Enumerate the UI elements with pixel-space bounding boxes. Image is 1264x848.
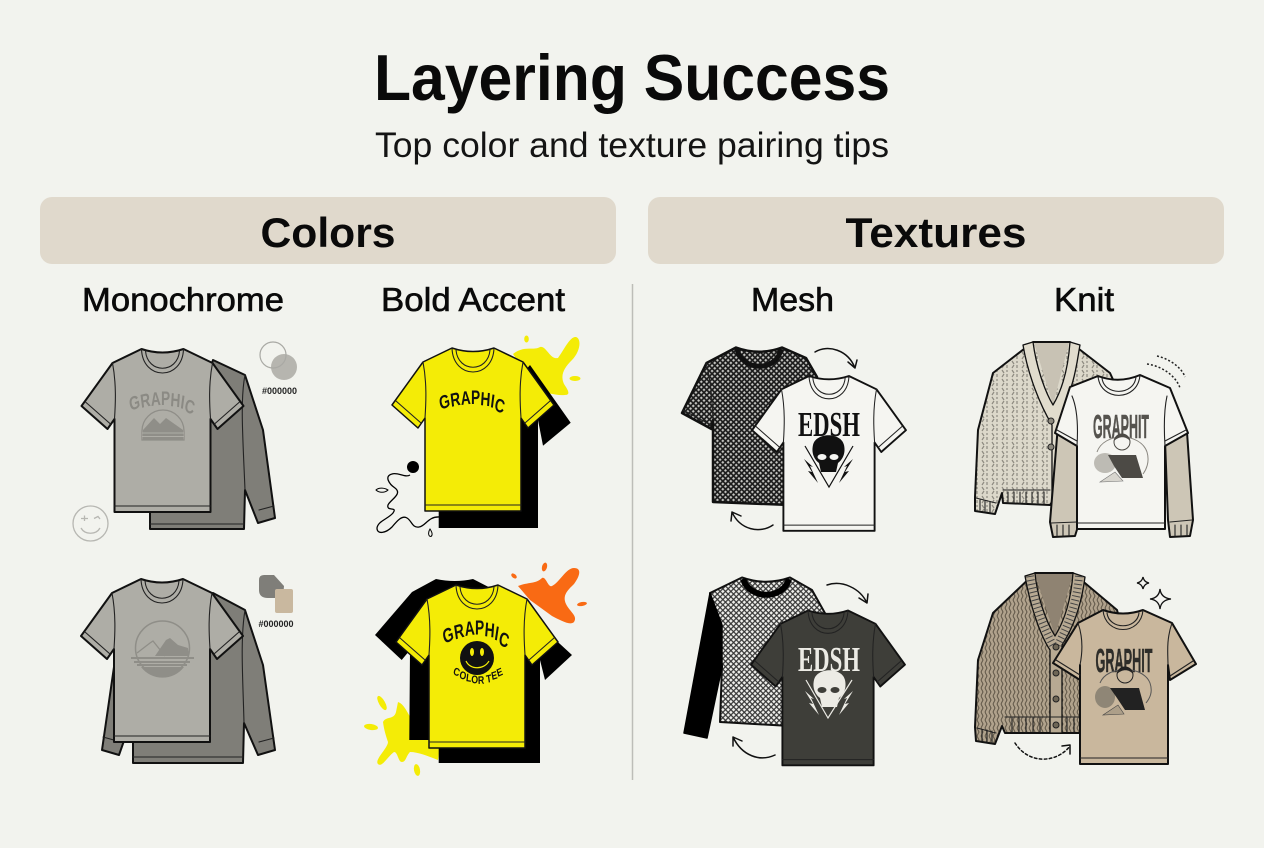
outfit: knit bottom (975, 573, 1196, 764)
tee graphic (798, 640, 860, 718)
black tee behind (375, 579, 572, 763)
panel: colors header (40, 197, 616, 264)
tee graphic (127, 388, 197, 440)
outfit: knit top (975, 342, 1193, 537)
arrow (731, 512, 773, 530)
tee graphic (798, 405, 860, 487)
yellow splash (513, 336, 580, 395)
under sleeves (1050, 425, 1193, 537)
heading: Mesh: Mesh (751, 281, 834, 318)
tee graphic (1095, 642, 1152, 715)
white tee (752, 376, 906, 531)
dashed arrow (1015, 743, 1070, 759)
tee text: GRAPHIC (437, 387, 507, 418)
hex label: #000000 (262, 386, 297, 396)
tee graphic (1093, 408, 1149, 482)
panel: textures header (648, 197, 1224, 264)
arrow (815, 349, 857, 368)
long sleeve behind (150, 360, 275, 529)
heading: Monochrome: Monochrome (82, 281, 284, 318)
grey tee (82, 349, 244, 512)
cardigan (975, 573, 1125, 744)
heading: Bold Accent: Bold Accent (381, 281, 565, 318)
outfit: knit bottom: GRAPHIT (1096, 642, 1152, 679)
title: Layering Success (374, 41, 890, 114)
icon: smiley (73, 506, 108, 541)
dark tee (751, 610, 905, 765)
tee graphic: GRAPHIC (440, 616, 511, 653)
outfit: mesh bottom (684, 578, 905, 765)
tee graphic: EDSH (798, 405, 860, 444)
yellow splash (364, 695, 440, 776)
long sleeve behind (102, 593, 275, 763)
outfit: knit top: GRAPHIT (1093, 408, 1149, 445)
black tee behind (439, 365, 571, 528)
color swatches (259, 575, 293, 613)
outfit: bold accent top (376, 336, 580, 536)
outfit: monochrome top (73, 342, 297, 541)
swatch circles (260, 342, 297, 380)
arrow head (1062, 745, 1070, 754)
tee graphic: COLOR TEE (452, 666, 505, 687)
tan tee (1053, 610, 1196, 764)
white tee (1055, 375, 1188, 529)
subtitle: Top color and texture pairing tips (375, 126, 889, 165)
sparkles (1137, 577, 1171, 609)
mesh tee (682, 348, 817, 505)
outfit: bold accent bottom (364, 562, 587, 776)
panel: textures header: Textures (846, 209, 1026, 256)
tee graphic (440, 616, 511, 687)
heading: Knit: Knit (1054, 281, 1114, 318)
tee graphic: GRAPHIC (127, 388, 197, 419)
hex label: #000000 (258, 619, 294, 629)
cardigan (975, 342, 1120, 514)
tee graphic (131, 621, 194, 678)
grey tee (81, 579, 243, 742)
dotted motion lines (1147, 356, 1185, 388)
tee graphic: EDSH (798, 640, 860, 679)
orange splash (510, 562, 587, 623)
panel: colors header: Colors (260, 209, 396, 256)
outfit: mesh top (682, 348, 906, 531)
yellow tee (396, 585, 558, 748)
arrow (827, 584, 868, 603)
outfit: monochrome bottom (81, 575, 294, 763)
squiggle (376, 461, 440, 536)
mesh long sleeve (684, 578, 826, 738)
yellow tee (392, 348, 554, 511)
arrow (733, 737, 775, 758)
